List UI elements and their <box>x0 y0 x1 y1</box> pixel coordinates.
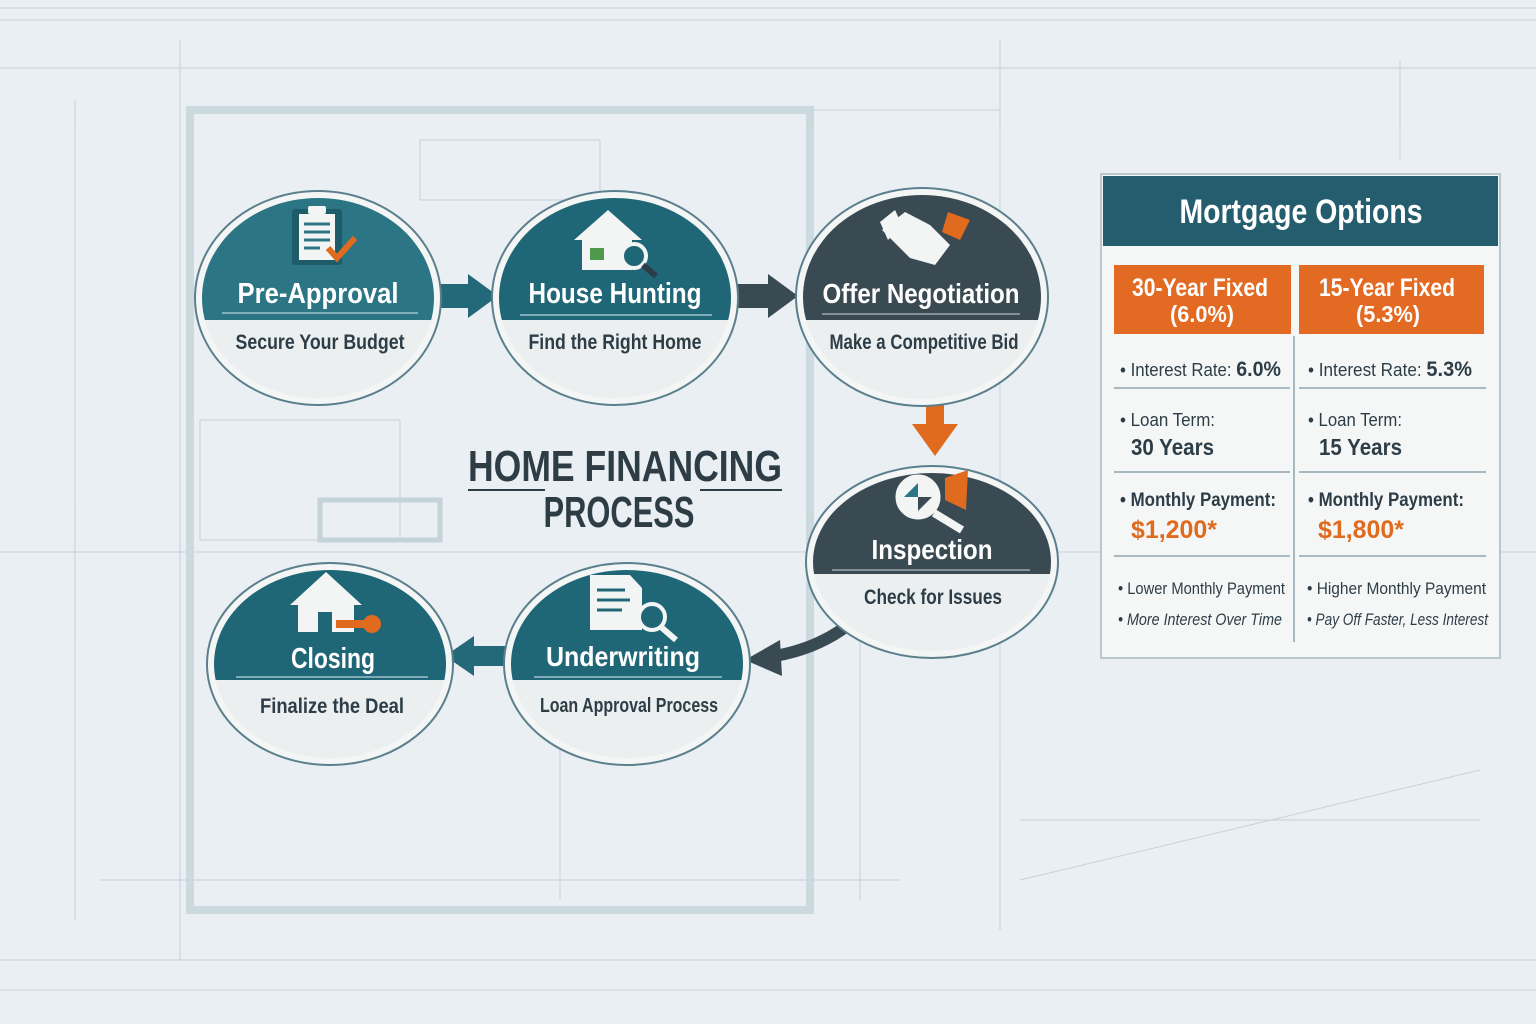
heading: Underwriting <box>546 641 700 672</box>
column header: 30-year: (6.0%) <box>1170 301 1234 327</box>
column: 30-year details: 30 Years <box>1131 434 1214 460</box>
icon: house with magnifier <box>574 210 656 276</box>
title <box>468 442 782 537</box>
step 5: Underwriting <box>500 560 760 770</box>
column header: 15-year: (5.3%) <box>1356 301 1420 327</box>
step 6: Closing <box>200 560 460 770</box>
column: 15-year details: • Higher Monthly Payment <box>1307 579 1486 598</box>
title: HOME FINANCING <box>468 442 782 491</box>
arrow: underwriting to closing <box>445 636 506 676</box>
column: 15-year details <box>1307 358 1489 629</box>
icon: house with key <box>290 572 381 633</box>
icon: magnifier <box>898 470 968 530</box>
column: 15-year details: 15 Years <box>1319 434 1402 460</box>
column header: 30-year: 30-Year Fixed <box>1132 274 1268 302</box>
arrow: house hunting to offer <box>735 274 798 318</box>
icon: handshake <box>880 210 970 265</box>
column header: 30-year <box>1114 265 1291 334</box>
subtext: Make a Competitive Bid <box>830 331 1018 354</box>
column: 15-year details: $1,800* <box>1318 516 1404 544</box>
subtext: Find the Right Home <box>528 331 702 354</box>
step 3: Offer Negotiation <box>795 187 1049 407</box>
title: PROCESS <box>544 488 694 537</box>
column: 30-year details <box>1118 358 1285 629</box>
subtext: Finalize the Deal <box>260 695 404 718</box>
table header <box>1103 176 1498 246</box>
column header: 15-year <box>1299 265 1484 334</box>
column: 15-year details: • Loan Term: <box>1308 410 1402 430</box>
heading: Pre-Approval <box>238 278 398 310</box>
table header: Mortgage Options <box>1180 193 1422 231</box>
step 4: Inspection <box>805 465 1059 659</box>
column: 30-year details: • Interest Rate: 6.0% <box>1120 358 1281 381</box>
heading: Inspection <box>872 534 992 565</box>
column: 30-year details: • Lower Monthly Payment <box>1118 579 1285 598</box>
column: 15-year details: • Interest Rate: 5.3% <box>1308 358 1472 381</box>
column: 30-year details: • Loan Term: <box>1120 410 1215 430</box>
column: 30-year details: $1,200* <box>1131 516 1217 544</box>
panel: mortgage options <box>1101 174 1500 658</box>
subtext: Check for Issues <box>864 586 1002 609</box>
icon: clipboard <box>292 206 355 265</box>
column: 30-year details: • More Interest Over Time <box>1118 610 1282 629</box>
step 1: Pre-Approval <box>194 190 442 406</box>
icon: document with magnifier <box>590 575 676 640</box>
step 2: House Hunting <box>491 190 739 406</box>
arrow: pre-approval to house hunting <box>440 274 498 318</box>
column: 15-year details: • Monthly Payment: <box>1308 490 1464 511</box>
column header: 15-year: 15-Year Fixed <box>1319 274 1455 302</box>
column: 30-year details: • Monthly Payment: <box>1120 490 1276 511</box>
arrow: offer to inspection (orange) <box>912 385 958 456</box>
arrow: inspection to underwriting (curved) <box>745 622 852 676</box>
heading: Offer Negotiation <box>822 278 1020 309</box>
column: 15-year details: • Pay Off Faster, Less Interest <box>1307 610 1489 629</box>
heading: House Hunting <box>528 278 702 310</box>
subtext: Secure Your Budget <box>236 331 404 354</box>
subtext: Loan Approval Process <box>540 695 718 717</box>
heading: Closing <box>291 643 375 675</box>
